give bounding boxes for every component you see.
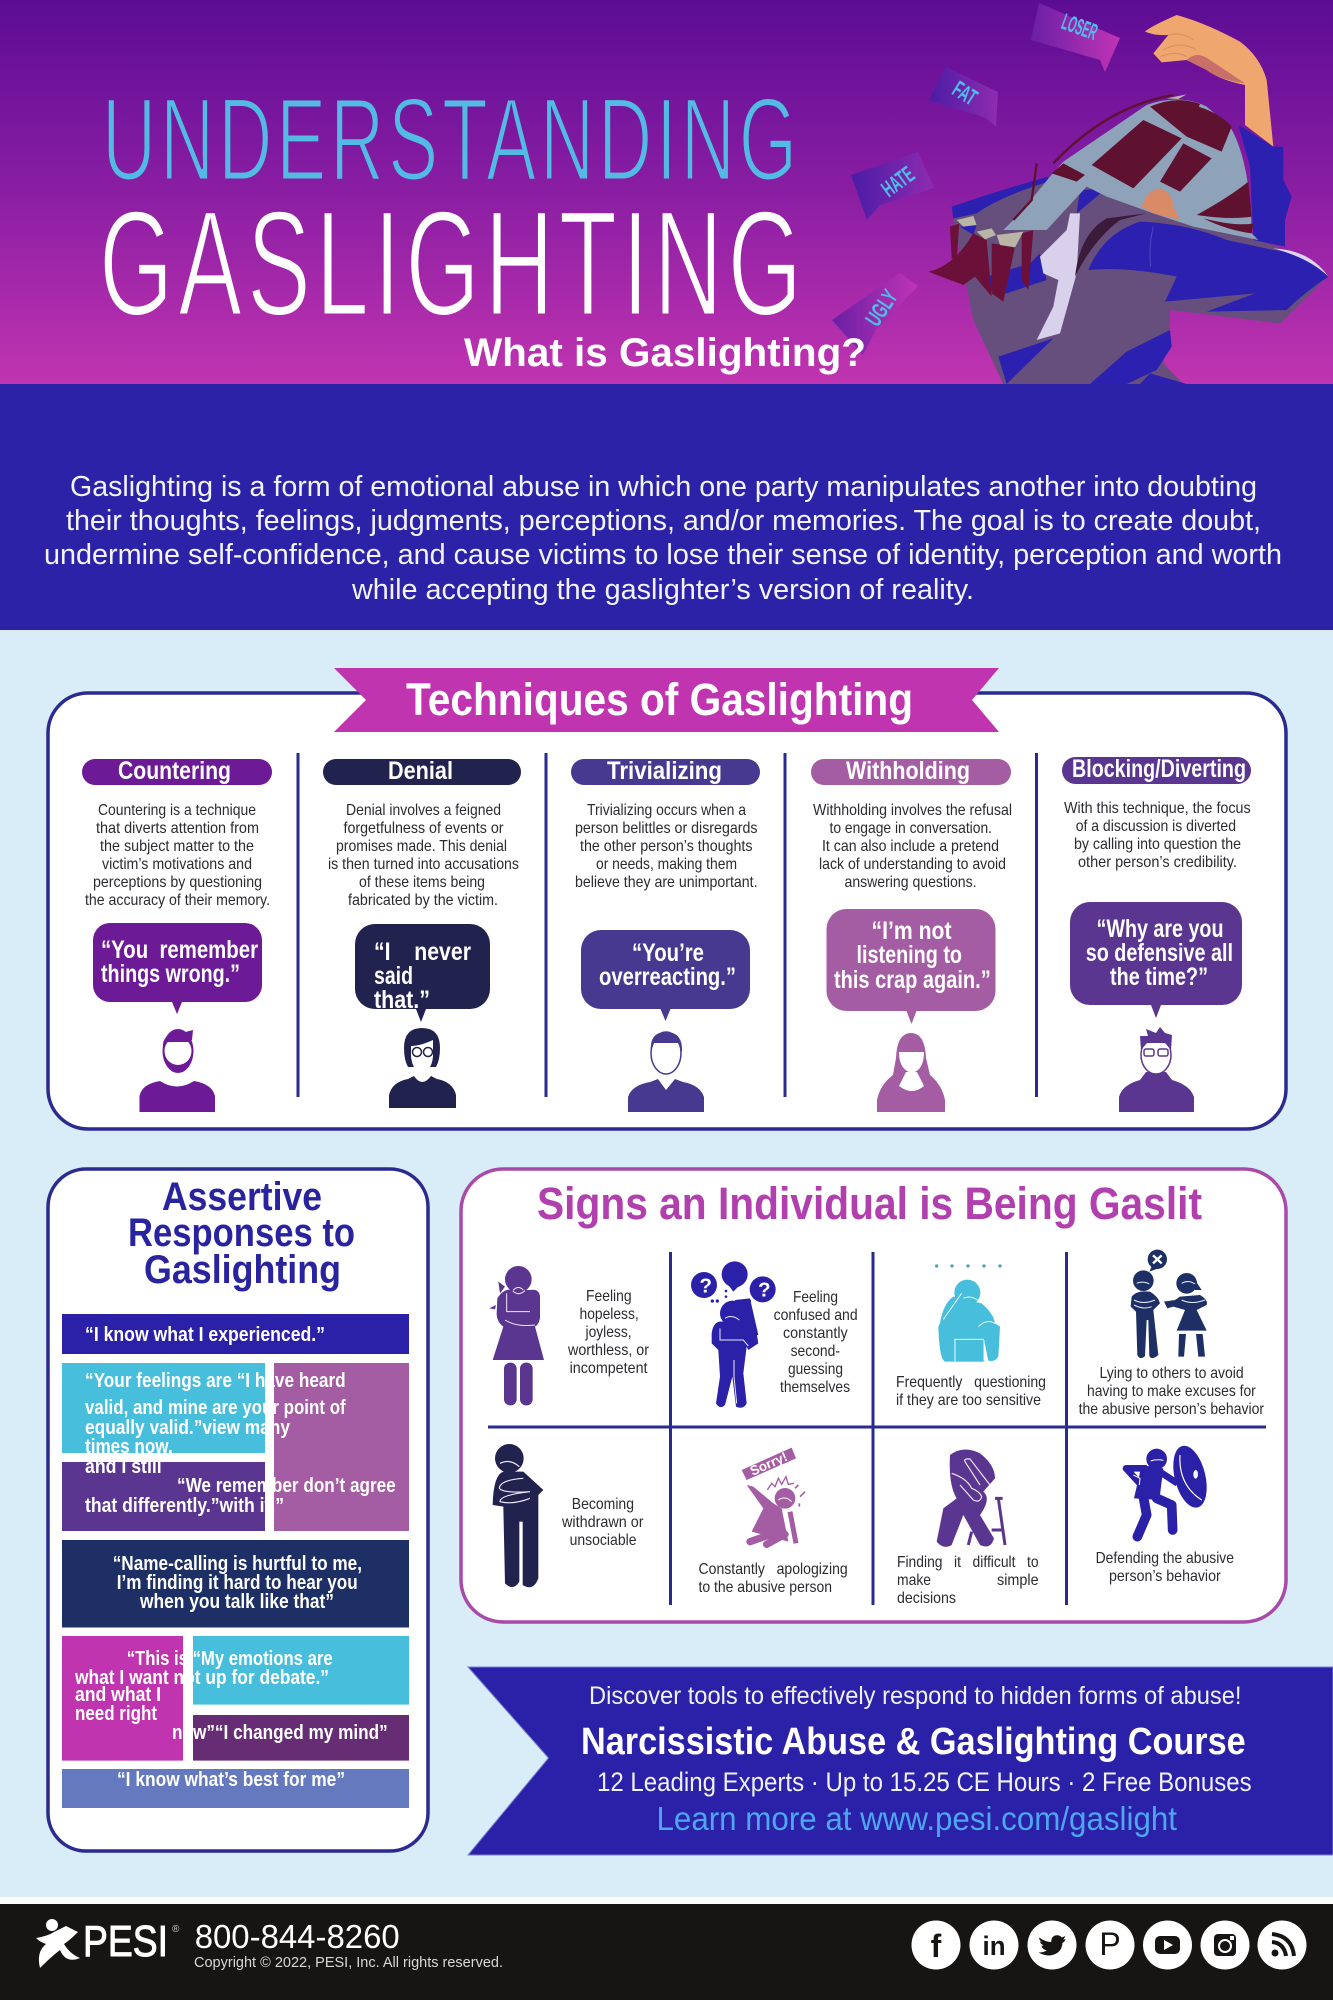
description: denial: of these items being [359, 874, 485, 891]
tag: hate: HATE [876, 161, 919, 202]
speech bubble: withholding: “I’m not [872, 917, 952, 945]
sign: confused [691, 1261, 858, 1408]
speech bubble: denial: “I never [374, 938, 471, 966]
icon: person under sorry sign [742, 1448, 805, 1544]
label: defending: person’s behavior [1109, 1568, 1221, 1585]
label: confused: guessing [788, 1361, 843, 1378]
person: woman with long hair [877, 1033, 945, 1112]
panel: signs an individual is being gaslit [461, 1169, 1286, 1622]
description: blocking/diverting: With this technique, the focus [1064, 800, 1251, 817]
heading: signs: Signs an Individual is Being Gaslit [537, 1178, 1202, 1229]
speech bubble: blocking/diverting: so defensive all [1086, 939, 1233, 967]
response quotes: and I still [85, 1456, 162, 1478]
panel: techniques of gaslighting [48, 668, 1286, 1129]
cta course title: Narcissistic Abuse & Gaslighting Course [581, 1721, 1246, 1763]
icon: sad girl [489, 1266, 544, 1405]
description: trivializing: the other person’s thoughts [580, 838, 752, 855]
icon: facebook [912, 1920, 960, 1970]
label: difficult decisions: Finding it difficult to [897, 1554, 1039, 1571]
icon: confused person with question bubbles [691, 1261, 776, 1408]
description: countering: that diverts attention from [96, 820, 259, 837]
cta lead line: Discover tools to effectively respond to hidden forms of abuse! [589, 1682, 1242, 1710]
response quotes: when you talk like that” [139, 1591, 334, 1613]
label: withdrawn: withdrawn or [561, 1514, 644, 1531]
logo: pesi: PESI [83, 1917, 168, 1966]
response quotes: need right [75, 1703, 157, 1725]
tag: hate [851, 152, 934, 220]
sign: hopeless [489, 1266, 650, 1405]
cta link: Learn more at www.pesi.com/gaslight [656, 1800, 1177, 1837]
label: too sensitive [896, 1374, 1046, 1409]
column dividers [298, 753, 1036, 1097]
column: blocking/diverting [1062, 755, 1251, 1112]
response quotes: now”“I changed my mind” [172, 1722, 388, 1744]
definition band [0, 384, 1333, 630]
label: withdrawn: Becoming [572, 1496, 634, 1513]
description: withholding [813, 802, 1012, 891]
person: bearded man [140, 1029, 215, 1112]
speech bubble: denial: said [374, 962, 413, 990]
description: trivializing: Trivializing occurs when a [587, 802, 746, 819]
description: blocking/diverting: of a discussion is diverted [1076, 818, 1236, 835]
icon: person under sorry sign: Sorry! [748, 1449, 790, 1479]
description: withholding: to engage in conversation. [830, 820, 992, 837]
heading: assertive responses to gaslighting: Responses to [128, 1211, 355, 1255]
icon: linkedin: in [982, 1931, 1006, 1961]
response quotes: valid, and mine are your point of [85, 1397, 346, 1419]
label: confused: second- [791, 1343, 840, 1360]
label: difficult decisions: decisions [897, 1590, 956, 1607]
description: countering: victim’s motivations and [102, 856, 252, 873]
description: denial: Denial involves a feigned [346, 802, 501, 819]
description: trivializing [575, 802, 758, 891]
label: hopeless: joyless, [585, 1324, 632, 1341]
description: blocking/diverting: other person’s credibility. [1078, 854, 1237, 871]
banner heading: Techniques of Gaslighting [406, 674, 913, 725]
icon: twitter [1028, 1920, 1076, 1970]
description: countering: Countering is a technique [98, 802, 256, 819]
speech bubble: denial: that.” [374, 986, 430, 1014]
column: withholding [811, 757, 1012, 1112]
tag: loser: LOSER [1058, 8, 1101, 45]
definition text: undermine self-confidence, and cause victims to lose their sense of identity, perception and worth [44, 539, 1282, 571]
label: confused: themselves [780, 1379, 850, 1396]
description: withholding: lack of understanding to avoid [819, 856, 1006, 873]
heading: assertive responses to gaslighting [128, 1175, 355, 1292]
label: lying to others: the abusive person’s behavior [1079, 1401, 1265, 1418]
icon: person with shield [1126, 1442, 1213, 1537]
tag: fat [929, 67, 998, 127]
label: apologizing: to the abusive person [698, 1579, 832, 1596]
label: apologizing: Constantly apologizing [698, 1561, 848, 1578]
pill: blocking/diverting: Blocking/Diverting [1072, 755, 1246, 783]
icon: seated person, cyan [935, 1264, 1002, 1362]
label: hopeless [567, 1288, 650, 1377]
heading: assertive responses to gaslighting: Gaslighting [144, 1248, 341, 1292]
pill: withholding: Withholding [846, 757, 970, 785]
heading: assertive responses to gaslighting: Assertive [162, 1175, 322, 1219]
speech bubble: trivializing [581, 930, 750, 1021]
response quotes [74, 1324, 396, 1791]
label: hopeless: worthless, or [567, 1342, 650, 1359]
response quotes: “Your feelings are “I have heard [85, 1370, 346, 1392]
definition text: their thoughts, feelings, judgments, perceptions, and/or memories. The goal is to create doubt, [66, 505, 1261, 537]
speech bubble: blocking/diverting [1070, 902, 1242, 1018]
response quotes: I’m finding it hard to hear you [117, 1572, 358, 1594]
label: lying to others: Lying to others to avoid [1100, 1365, 1244, 1382]
logo: pesi [36, 1917, 180, 1968]
response quotes: “I know what’s best for me” [117, 1769, 345, 1791]
sign: withdrawn [493, 1444, 644, 1587]
speech bubble: blocking/diverting: the time?” [1110, 963, 1208, 991]
description: withholding: It can also include a pretend [822, 838, 999, 855]
label: withdrawn [561, 1496, 644, 1549]
description: denial: fabricated by the victim. [348, 892, 498, 909]
description: trivializing: or needs, making them [596, 856, 737, 873]
response color blocks [62, 1314, 409, 1808]
speech bubble: denial [355, 924, 490, 1022]
icon: hunched person on chair [937, 1450, 1005, 1547]
label: difficult decisions: simple [997, 1572, 1039, 1589]
label: confused: constantly [783, 1325, 848, 1342]
response quotes: “Name-calling is hurtful to me, [113, 1553, 362, 1575]
label: too sensitive: if they are too sensitive [896, 1392, 1041, 1409]
cta details: 12 Leading Experts · Up to 15.25 CE Hours · 2 Free Bonuses [597, 1767, 1252, 1797]
sign: defending [1096, 1442, 1234, 1585]
response quotes: equally valid.”view many [85, 1417, 291, 1439]
column: countering [82, 757, 272, 1112]
icon: pinterest: P [1099, 1926, 1121, 1962]
title: gaslighting: GASLIGHTING [99, 179, 807, 347]
person: man in collared shirt [628, 1032, 704, 1112]
icon: withdrawn figure [493, 1444, 543, 1587]
grid lines [488, 1252, 1266, 1605]
response quotes: “I know what I experienced.” [85, 1324, 325, 1346]
sign: apologizing [698, 1448, 848, 1596]
response quotes: “This is “My emotions are [127, 1648, 333, 1670]
response quotes: “We remember don’t agree [177, 1475, 396, 1497]
phone number: 800-844-8260 [195, 1918, 400, 1955]
response quotes: that differently.”with it.” [85, 1495, 284, 1517]
column: trivializing [571, 757, 760, 1112]
speech bubble: withholding: this crap again.” [834, 966, 991, 994]
panel: assertive responses [48, 1169, 428, 1851]
speech bubble: countering: “You remember [101, 936, 258, 964]
label: hopeless: incompetent [570, 1360, 648, 1377]
illustration: distressed woman [928, 15, 1328, 384]
definition text: Gaslighting is a form of emotional abuse in which one party manipulates another into doubting [70, 471, 1257, 503]
label: defending: Defending the abusive [1096, 1550, 1234, 1567]
label: too sensitive: Frequently questioning [896, 1374, 1046, 1391]
description: denial: is then turned into accusations [328, 856, 519, 873]
footer [0, 1897, 1333, 2000]
description: trivializing: believe they are unimportant. [575, 874, 758, 891]
label: apologizing [698, 1561, 848, 1596]
icon: youtube [1143, 1920, 1192, 1970]
pill: trivializing: Trivializing [607, 757, 722, 785]
label: difficult decisions: make [897, 1572, 931, 1589]
description: withholding: Withholding involves the refusal [813, 802, 1012, 819]
tag: ugly: UGLY [860, 285, 903, 331]
title: understanding: UNDERSTANDING [102, 74, 801, 206]
label: lying to others [1079, 1365, 1265, 1418]
label: confused: confused and [774, 1307, 858, 1324]
icon: facebook: f [931, 1928, 942, 1964]
speech bubble: blocking/diverting: “Why are you [1096, 915, 1224, 943]
speech bubble: countering [93, 923, 262, 1014]
response quotes: and what I [75, 1684, 161, 1706]
description: denial [328, 802, 519, 909]
icon: instagram [1200, 1920, 1250, 1970]
person: man with glasses [1119, 1027, 1194, 1112]
speech bubble: withholding: listening to [856, 941, 962, 969]
description: blocking/diverting [1064, 800, 1251, 871]
label: difficult decisions [897, 1554, 1039, 1607]
icon: two people with no bubble [1131, 1250, 1207, 1358]
speech bubble: trivializing: “You’re [632, 939, 704, 967]
definition text [44, 471, 1282, 606]
speech bubble: trivializing: overreacting.” [599, 963, 736, 991]
speech bubble: countering: things wrong.” [101, 960, 240, 988]
icon: rss [1258, 1920, 1306, 1970]
response quotes: what I want not up for debate.” [74, 1667, 329, 1689]
response quotes: times now, [85, 1436, 173, 1458]
description: trivializing: person belittles or disregards [575, 820, 758, 837]
icon: confused person with question bubbles: ? [699, 1274, 712, 1297]
sign: difficult decisions [897, 1450, 1039, 1607]
pill: countering: Countering [118, 757, 231, 785]
description: denial: promises made. This denial [336, 838, 507, 855]
icon: confused person with question bubbles: ? [758, 1279, 771, 1302]
label: lying to others: having to make excuses for [1087, 1383, 1256, 1400]
tag: ugly [832, 273, 918, 355]
description: countering: the subject matter to the [100, 838, 254, 855]
label: hopeless: hopeless, [580, 1306, 639, 1323]
column: denial [323, 757, 521, 1108]
header banner [0, 0, 1333, 384]
tag: fat: FAT [948, 76, 982, 110]
label: hopeless: Feeling [586, 1288, 632, 1305]
description: blocking/diverting: by calling into question the [1074, 836, 1241, 853]
sign: lying to others [1079, 1250, 1265, 1418]
label: defending [1096, 1550, 1234, 1585]
heading: what is gaslighting: What is Gaslighting? [464, 331, 866, 375]
tag: loser [1031, 3, 1120, 72]
pill: trivializing [571, 757, 760, 785]
pill: denial [323, 757, 521, 785]
description: countering: perceptions by questioning [93, 874, 262, 891]
icon: pinterest [1086, 1920, 1134, 1970]
course call-to-action ribbon [468, 1667, 1333, 1855]
banner heading [334, 668, 999, 732]
description: countering: the accuracy of their memory. [85, 892, 270, 909]
definition text: while accepting the gaslighter’s version of reality. [351, 574, 974, 606]
logo: pesi: ® [172, 1924, 180, 1935]
label: withdrawn: unsociable [570, 1532, 637, 1549]
icon: linkedin [970, 1920, 1018, 1970]
description: withholding: answering questions. [844, 874, 976, 891]
description: denial: forgetfulness of events or [344, 820, 504, 837]
speech bubble: withholding [826, 909, 996, 1024]
label: confused: Feeling [793, 1289, 838, 1306]
pill: denial: Denial [388, 757, 453, 785]
copyright: Copyright © 2022, PESI, Inc. All rights reserved. [194, 1955, 503, 1971]
description: countering [85, 802, 270, 909]
person: woman with glasses [389, 1028, 456, 1108]
label: confused [774, 1289, 858, 1396]
sign: too sensitive [896, 1264, 1046, 1409]
